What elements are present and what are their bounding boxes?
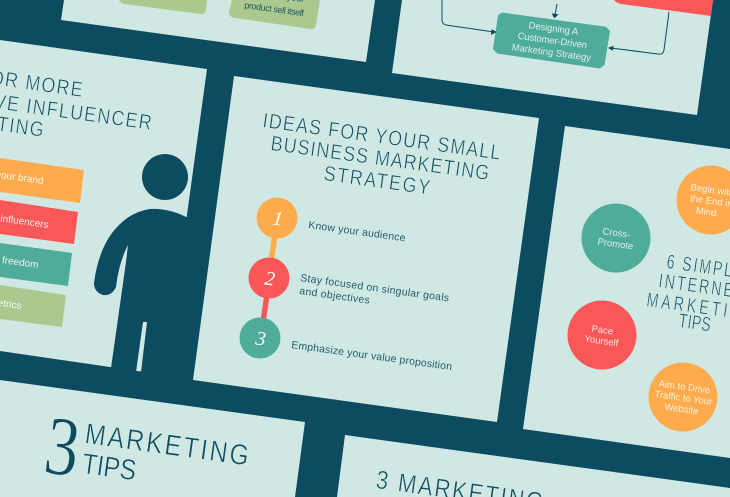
circle: Aim to Drive Traffic to Your Website: Aim to Drive xyxy=(658,379,711,397)
step 3: 3 xyxy=(253,327,267,351)
list bar: metrics xyxy=(0,285,66,327)
panel: top-left product tips xyxy=(61,0,375,62)
heading: STRATEGY xyxy=(322,162,432,200)
circle: Aim to Drive Traffic to Your Website: Website xyxy=(664,402,699,417)
circle: Begin with the End in Mind: Mind. xyxy=(695,205,720,220)
list bar: influencers: influencers xyxy=(0,213,49,231)
panel: influencer marketing xyxy=(0,40,207,376)
green flow box: Designing A Customer-Driven Marketing Strategy: Marketing Strategy xyxy=(511,42,592,64)
heading: IDEAS FOR YOUR SMALL xyxy=(261,109,502,165)
green tip box left xyxy=(119,0,207,14)
step 1: Know your audience xyxy=(308,219,406,244)
heading: TIPS xyxy=(677,309,712,336)
big numeral 3: 3 xyxy=(39,399,85,495)
connector 1 to 2 xyxy=(271,235,275,262)
step 3: Emphasize your value proposition xyxy=(291,339,453,373)
list bar: freedom: freedom xyxy=(1,255,39,271)
circle: Pace Yourself xyxy=(568,300,636,370)
circle: Cross-Promote: Cross- xyxy=(602,226,631,241)
panel: top-right strategy flowchart xyxy=(392,0,713,115)
step 3 xyxy=(240,318,453,373)
flow arrows xyxy=(442,0,669,54)
step 2: Stay focused on singular goals xyxy=(300,272,450,304)
heading: MARKETING xyxy=(83,417,251,472)
heading xyxy=(645,250,730,336)
red flow box xyxy=(614,0,713,16)
circle: Pace Yourself: Pace xyxy=(591,324,614,337)
heading xyxy=(261,109,502,200)
circle: Cross-Promote: Promote xyxy=(597,237,634,252)
panel: 6 simple internet marketing tips xyxy=(523,126,730,458)
green flow box: Designing A Customer-Driven Marketing Strategy xyxy=(493,12,610,68)
panel: 3 marketing bottom-center xyxy=(337,435,730,497)
connector 2 to 3 xyxy=(263,295,267,322)
step 2 xyxy=(248,258,450,307)
step 2: 2 xyxy=(263,267,276,291)
step 2: and objectives xyxy=(299,285,371,307)
list bar: your brand xyxy=(0,158,84,203)
panel: ideas for small business marketing strategy xyxy=(193,76,539,422)
heading: TIPS xyxy=(80,447,138,487)
step 1: 1 xyxy=(271,207,284,231)
circle: Cross-Promote xyxy=(582,204,650,272)
icon: person silhouette xyxy=(94,154,192,376)
circle: Begin with the End in Mind xyxy=(676,166,730,234)
circle: Aim to Drive Traffic to Your Website: Traffic to Your xyxy=(654,389,713,408)
green flow box: Designing A Customer-Driven Marketing Strategy: Customer-Driven xyxy=(517,31,588,51)
list bar: influencers xyxy=(0,200,78,244)
green tip box right xyxy=(229,0,320,29)
circle: Aim to Drive Traffic to Your Website xyxy=(648,362,718,432)
list bar: freedom xyxy=(0,243,72,286)
green flow box: Designing A Customer-Driven Marketing Strategy: Designing A xyxy=(528,20,580,38)
step 1 xyxy=(256,198,406,244)
green tip box right: product sell itself xyxy=(244,0,305,18)
heading: BUSINESS MARKETING xyxy=(269,132,491,185)
panel: 3 marketing tips bottom-left xyxy=(0,380,305,497)
circle: Pace Yourself: Yourself xyxy=(584,334,619,349)
